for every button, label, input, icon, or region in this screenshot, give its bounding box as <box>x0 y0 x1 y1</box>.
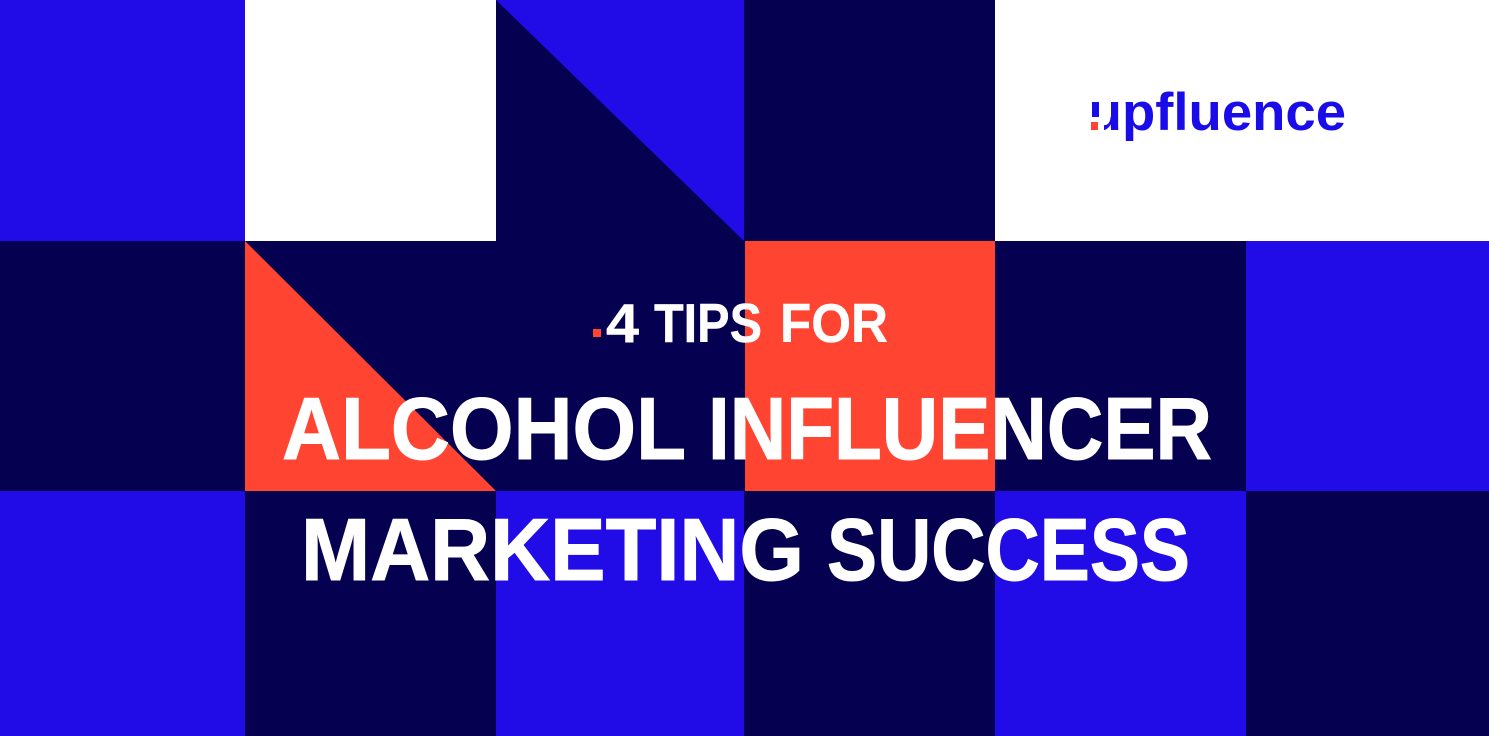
title line 1: INFLUENCER <box>708 379 1212 478</box>
title line 1 <box>282 379 1212 478</box>
logo: upfluence: u <box>1088 83 1122 142</box>
title line 2: MARKETING <box>301 500 804 599</box>
title line 2: SUCCESS <box>827 500 1190 599</box>
title line 1: ALCOHOL <box>282 379 686 478</box>
logo: upfluence: pfluence <box>1122 83 1346 142</box>
subtitle: 4 <box>606 292 639 354</box>
subtitle: TIPS <box>654 292 762 354</box>
subtitle: FOR <box>780 292 888 354</box>
subtitle <box>593 292 888 354</box>
title line 2 <box>301 500 1190 599</box>
